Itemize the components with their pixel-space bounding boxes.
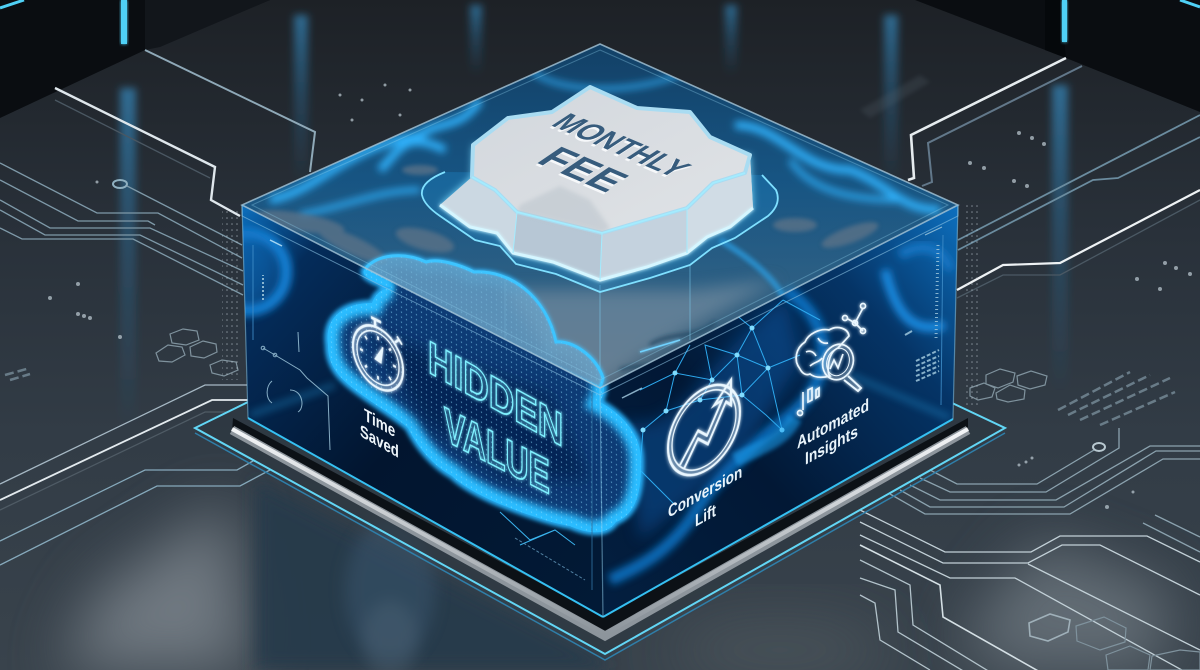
monthly fee slab	[422, 87, 778, 292]
dark server blocks at top	[0, 0, 1200, 118]
vertical blue light streaks	[120, 5, 1068, 428]
label: time saved: Saved	[360, 421, 399, 462]
slab text: monthly fee: MONTHLY	[544, 109, 698, 182]
headline: hidden value: HIDDEN	[428, 332, 563, 458]
conversion lift icon	[668, 371, 740, 489]
label: conversion lift: Conversion	[668, 462, 742, 522]
dotted columns and data dots	[5, 75, 1192, 509]
cloud top seen through the glass	[350, 250, 610, 390]
label: automated insights: Automated	[797, 395, 869, 453]
blue wisps inside faces	[200, 230, 950, 580]
circuit traces right	[860, 58, 1200, 670]
slab text: monthly fee: FEE	[527, 141, 638, 198]
hidden value cloud	[320, 250, 650, 545]
neural network sphere	[640, 300, 820, 505]
glass box	[200, 44, 958, 617]
box top face	[242, 44, 958, 388]
hexagon clusters	[156, 329, 1200, 670]
platform base	[195, 402, 1005, 660]
stopwatch icon	[353, 308, 403, 400]
left face circuit detail	[253, 240, 592, 590]
headline: hidden value: VALUE	[444, 397, 550, 506]
label: automated insights: Insights	[805, 422, 858, 469]
top rim of glass box	[242, 44, 958, 617]
circuit traces left	[0, 50, 315, 565]
label: conversion lift: Lift	[695, 500, 716, 531]
water texture on top face	[254, 70, 940, 388]
box right face	[600, 205, 958, 617]
slab text: monthly fee: MONTHLY	[542, 111, 696, 184]
label: time saved: Time	[364, 405, 395, 442]
box left face	[242, 205, 603, 617]
automated insights icon	[796, 304, 866, 416]
right face scale detail	[622, 227, 943, 405]
slab text: monthly fee: FEE	[525, 143, 636, 200]
